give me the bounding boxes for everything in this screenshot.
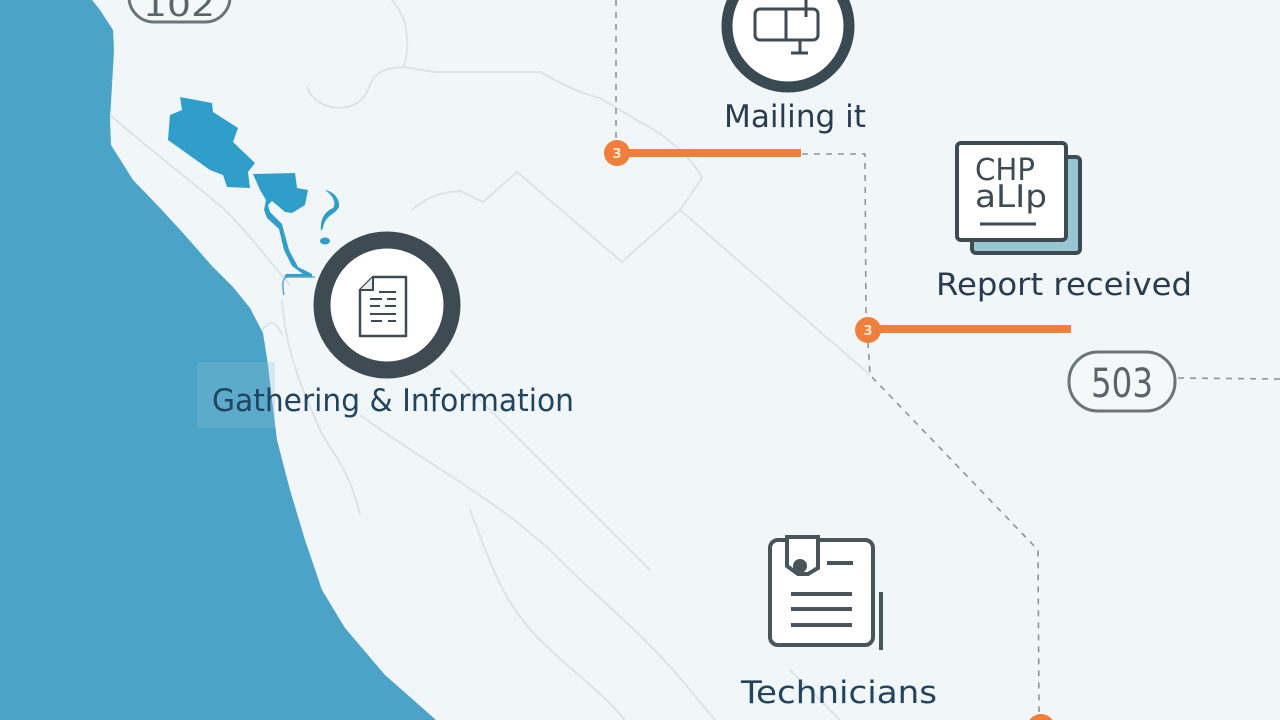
marker 3 with orange bar — [855, 317, 1071, 343]
route shield: 102 — [129, 0, 230, 24]
thin water line — [283, 277, 315, 295]
icon: clipboard document — [770, 537, 881, 650]
bay water shapes — [168, 97, 339, 277]
heading: Technicians — [740, 675, 937, 711]
label backing — [197, 362, 275, 428]
route shield: 503 — [1069, 352, 1175, 411]
dashed route — [616, 0, 1280, 712]
icon: CHP report: aLIp — [975, 179, 1047, 215]
road network — [110, 0, 870, 720]
heading: Mailing it — [724, 99, 866, 135]
marker 3 with orange bar: 3 — [863, 324, 873, 339]
marker 4 — [1027, 714, 1055, 720]
route shield: 503: 503 — [1091, 361, 1153, 407]
icon: CHP report — [957, 143, 1080, 253]
heading: Report received — [936, 267, 1192, 303]
heading: Gathering & Information — [212, 383, 574, 419]
icon: CHP report: CHP — [975, 153, 1035, 188]
step: technicians — [740, 537, 937, 711]
marker 2 with orange bar: 3 — [612, 147, 622, 162]
icon: document in ring — [322, 240, 452, 370]
step: report received — [855, 143, 1192, 343]
step: gathering and information — [197, 240, 574, 428]
icon: mailbox in ring — [727, 0, 849, 87]
marker 2 with orange bar — [604, 140, 801, 166]
step: mailing it — [604, 0, 866, 166]
ocean and coastline — [0, 0, 436, 720]
